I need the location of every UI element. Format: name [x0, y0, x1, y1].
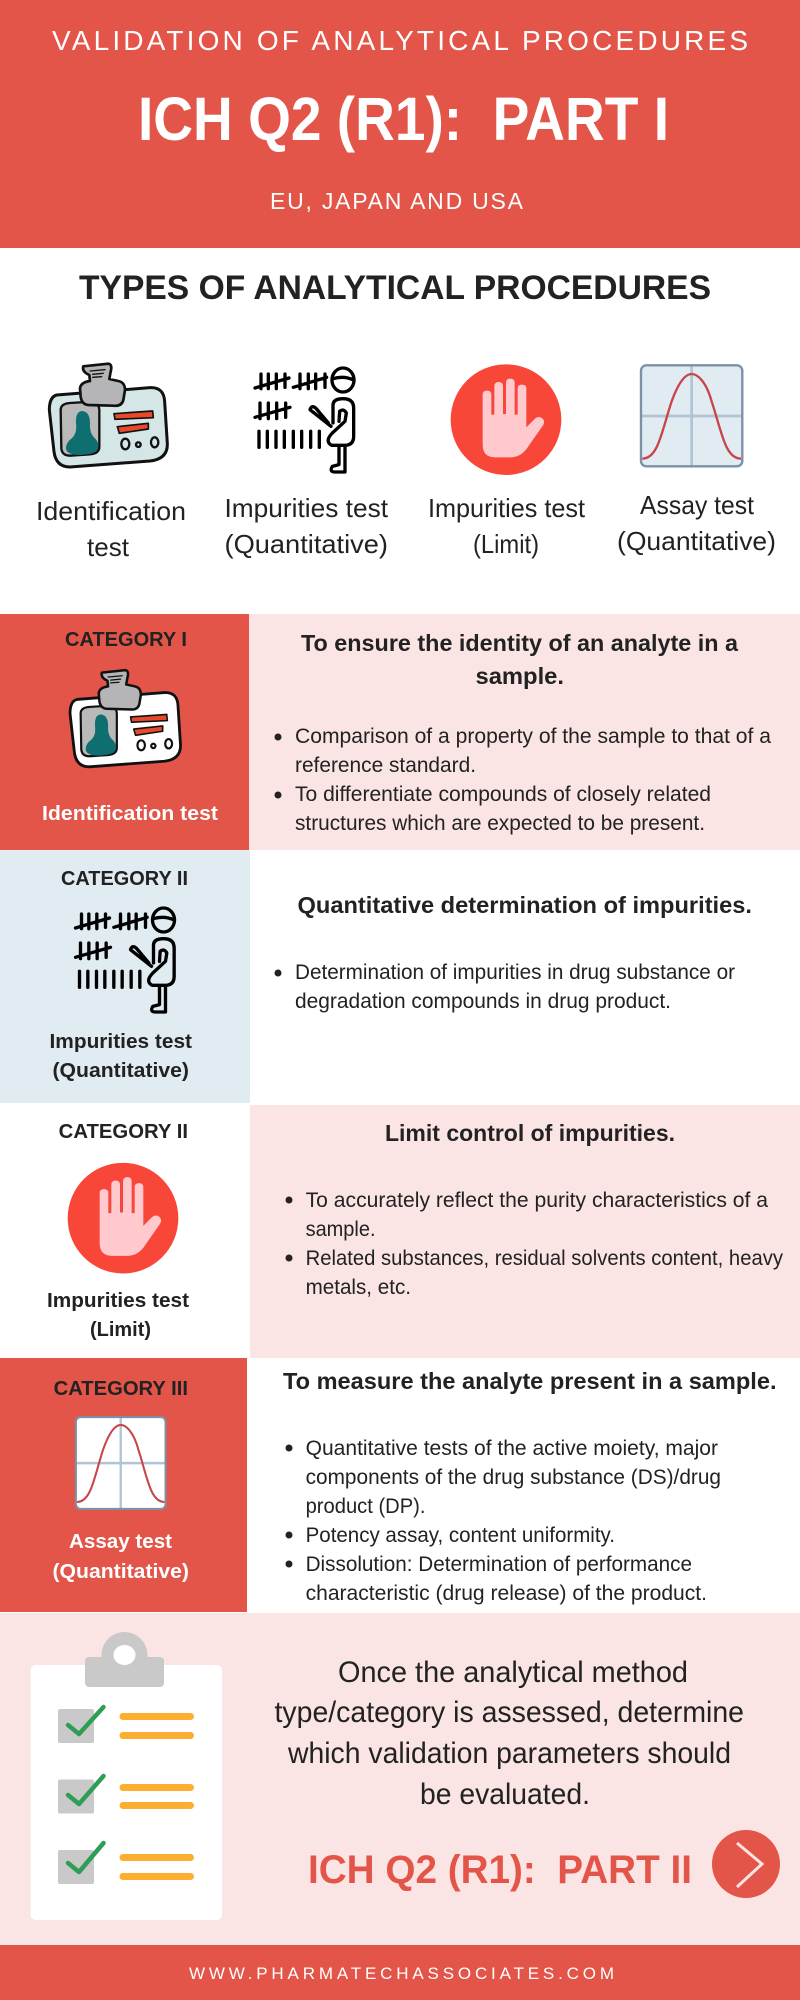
category II limit bullet list: [286, 1189, 783, 1299]
label: impurities test limit: [428, 493, 586, 559]
footer website: WWW.PHARMATECHASSOCIATES.COM: [189, 1964, 614, 1983]
category I bullet list: To differentiate compounds of closely related: [295, 783, 711, 806]
icon: tally marks and person: [255, 368, 354, 472]
icon: clipboard checklist: [31, 1632, 222, 1920]
category III heading: CATEGORY III: [54, 1378, 188, 1400]
category I heading: CATEGORY I: [65, 629, 187, 651]
category II limit label: [47, 1290, 189, 1341]
icon: identification badge small: [70, 670, 181, 767]
label: impurities test quantitative: [224, 493, 389, 559]
icon: next arrow button: [712, 1830, 780, 1898]
label: identification test: [36, 496, 186, 562]
category II label: Impurities test: [50, 1031, 192, 1053]
category II limit bullet list: Related substances, residual solvents content, heavy: [306, 1247, 783, 1270]
icon: tally marks and person small: [75, 908, 174, 1012]
category I bullet list: structures which are expected to be present.: [295, 812, 705, 835]
category II bullet list: [274, 961, 735, 1013]
header kicker: VALIDATION OF ANALYTICAL PROCEDURES: [52, 25, 748, 56]
header subtitle: EU, JAPAN AND USA: [270, 188, 524, 214]
panel: category I: [0, 614, 800, 850]
category III statement: To measure the analyte present in a sample.: [283, 1368, 776, 1394]
category II label: [50, 1031, 192, 1082]
category II label: (Quantitative): [52, 1060, 189, 1082]
label: assay test quantitative: (Quantitative): [617, 526, 776, 556]
category III bullet list: Potency assay, content uniformity.: [306, 1524, 615, 1547]
icon: stop hand: [451, 364, 561, 475]
main title: ICH Q2 (R1): PART I: [138, 85, 669, 153]
icon: assay bell curve small: [76, 1417, 166, 1509]
header banner: [0, 0, 800, 248]
category I label: Identification test: [42, 803, 218, 825]
footer bar: [0, 1945, 800, 2000]
category II limit bullet list: To accurately reflect the purity characteristics of a: [306, 1189, 768, 1212]
category II limit label: (Limit): [90, 1319, 151, 1341]
category I statement: To ensure the identity of an analyte in a: [301, 630, 738, 656]
label: impurities test limit: (Limit): [473, 529, 539, 559]
icon: stop hand small: [68, 1163, 178, 1273]
label: impurities test quantitative: Impurities test: [224, 493, 389, 523]
section heading: types of analytical procedures: TYPES OF ANALYTICAL PROCEDURES: [79, 269, 711, 307]
closing paragraph: type/category is assessed, determine: [274, 1696, 744, 1729]
category III label: (Quantitative): [52, 1561, 189, 1583]
part II link title: ICH Q2 (R1): PART II: [308, 1848, 692, 1892]
category III bullet list: product (DP).: [306, 1495, 426, 1518]
category II bullet list: Determination of impurities in drug substance or: [295, 961, 735, 984]
panel: category III: [0, 1358, 776, 1612]
category I bullet list: reference standard.: [295, 754, 476, 777]
closing paragraph: Once the analytical method: [338, 1656, 688, 1689]
category I statement: sample.: [476, 663, 564, 689]
category I statement: [301, 630, 738, 689]
label: identification test: test: [87, 532, 130, 562]
category II limit statement: Limit control of impurities.: [385, 1120, 675, 1146]
closing paragraph: be evaluated.: [420, 1778, 590, 1811]
closing paragraph: [274, 1656, 744, 1811]
category III label: Assay test: [69, 1531, 172, 1553]
label: assay test quantitative: [617, 490, 776, 556]
icon: assay bell curve: [641, 365, 742, 466]
label: assay test quantitative: Assay test: [640, 490, 755, 520]
category II limit heading: CATEGORY II: [59, 1121, 188, 1143]
category II statement: Quantitative determination of impurities.: [298, 892, 752, 918]
category III bullet list: [286, 1437, 721, 1605]
category III label: [52, 1531, 189, 1583]
category III bullet list: characteristic (drug release) of the product.: [306, 1582, 707, 1605]
panel: category II quantitative: [0, 850, 752, 1103]
category II limit bullet list: metals, etc.: [306, 1276, 411, 1299]
category I bullet list: [274, 725, 771, 835]
icon: identification badge: [49, 364, 167, 467]
panel: next step call to action: [0, 1613, 800, 1945]
category II limit label: Impurities test: [47, 1290, 189, 1312]
category I bullet list: Comparison of a property of the sample to that of a: [295, 725, 771, 748]
category II bullet list: degradation compounds in drug product.: [295, 990, 671, 1013]
category II heading: CATEGORY II: [61, 868, 188, 890]
category III bullet list: components of the drug substance (DS)/drug: [306, 1466, 721, 1489]
category III bullet list: Dissolution: Determination of performance: [306, 1553, 692, 1576]
category III bullet list: Quantitative tests of the active moiety, major: [306, 1437, 718, 1460]
label: impurities test quantitative: (Quantitative): [224, 529, 388, 559]
closing paragraph: which validation parameters should: [287, 1737, 731, 1770]
label: impurities test limit: Impurities test: [428, 493, 586, 523]
panel: category II limit: [47, 1105, 800, 1358]
label: identification test: Identification: [36, 496, 186, 526]
category II limit bullet list: sample.: [306, 1218, 376, 1241]
